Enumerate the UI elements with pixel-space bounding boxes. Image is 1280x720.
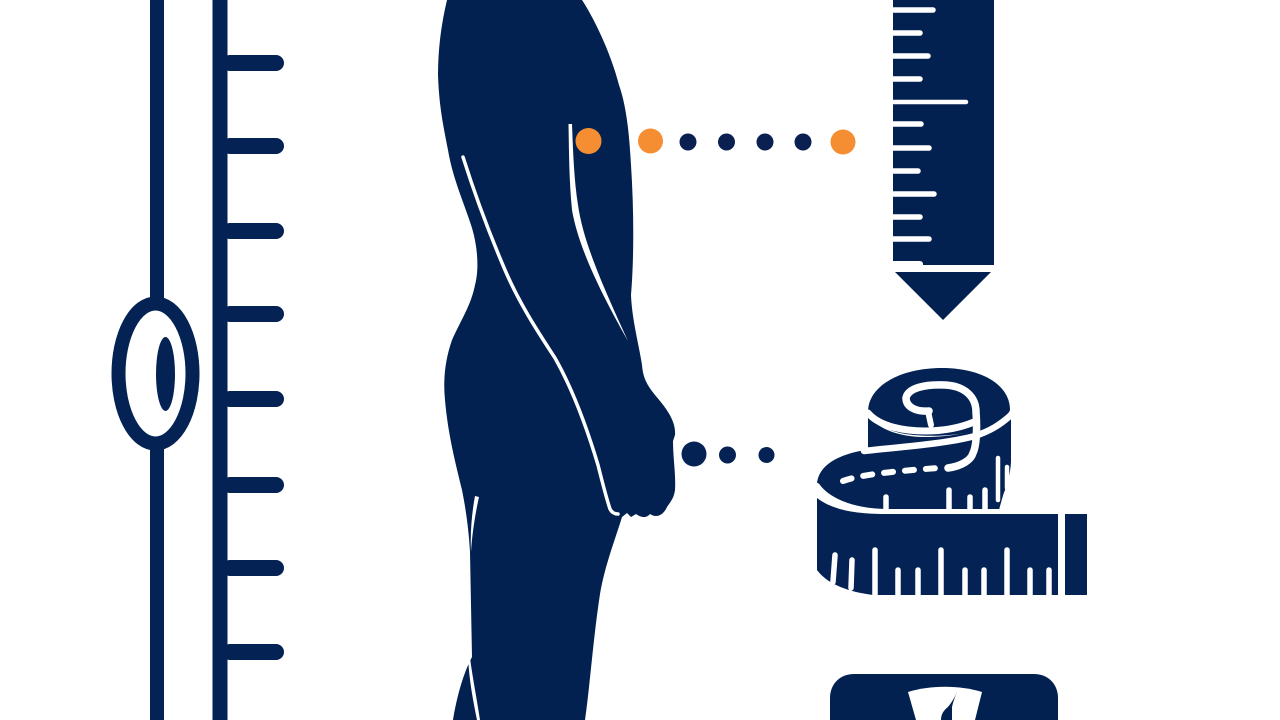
white contour line: back and hip — [463, 157, 618, 514]
body silhouette — [438, 0, 675, 720]
tape tick marks — [833, 550, 1049, 597]
white contour line: arm — [568, 124, 628, 341]
tape roll top — [868, 368, 1010, 436]
tape end tab — [1065, 514, 1087, 595]
lower measurement dots — [682, 442, 774, 466]
tape measure — [817, 368, 1087, 597]
tape lower band — [817, 498, 1058, 595]
ruler with arrow — [890, 0, 996, 320]
height scale — [118, 0, 284, 720]
white contour line: thigh — [471, 496, 479, 552]
upper measurement dots — [576, 128, 856, 154]
tape top surface — [817, 415, 1011, 510]
weighing scale — [830, 674, 1058, 720]
tape spiral and edge highlights — [817, 385, 1011, 512]
scale dial — [908, 687, 982, 720]
scale needle — [941, 692, 957, 720]
tape roll side — [855, 414, 1011, 510]
white contour line: knee — [468, 656, 480, 720]
